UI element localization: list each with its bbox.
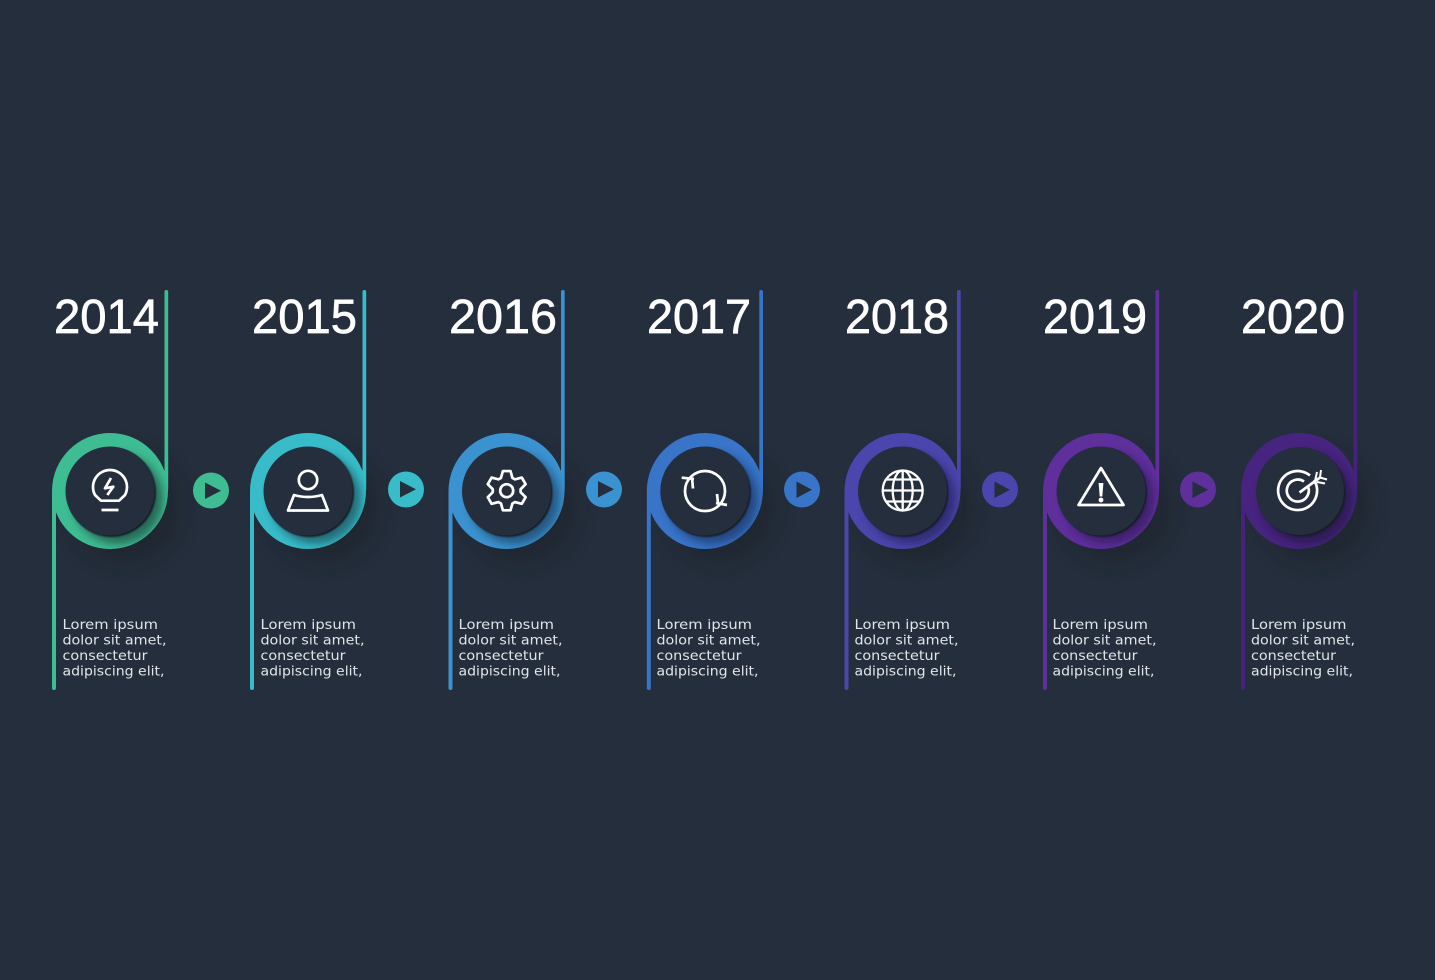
year 2018: 2018: [845, 291, 949, 344]
ring with connector lines 2015: [250, 290, 378, 690]
year 2015: 2015: [252, 291, 357, 344]
arrow button 2019: [1180, 472, 1216, 508]
text block 2020: adipiscing elit,: [1251, 664, 1353, 680]
arrow button 2014: [193, 472, 229, 508]
icon: globe: [883, 470, 923, 510]
text block 2015: consectetur: [260, 648, 346, 664]
text block 2014: Lorem ipsum: [62, 617, 158, 633]
arrow button 2015: [388, 472, 424, 508]
arrow button 2017: [784, 472, 820, 508]
text block 2016: [458, 617, 562, 680]
text block 2017: dolor sit amet,: [656, 632, 760, 648]
ring with connector lines 2016: [448, 290, 576, 690]
text block 2020: Lorem ipsum: [1251, 617, 1346, 633]
year 2019: 2019: [1043, 291, 1147, 344]
text block 2015: [260, 617, 364, 680]
text block 2017: adipiscing elit,: [656, 664, 758, 680]
text block 2019: consectetur: [1052, 648, 1138, 664]
text block 2014: consectetur: [62, 648, 148, 664]
icon: target with arrow: [1278, 470, 1327, 510]
text block 2018: Lorem ipsum: [854, 617, 950, 633]
text block 2018: adipiscing elit,: [854, 664, 956, 680]
text block 2016: adipiscing elit,: [458, 664, 560, 680]
text block 2020: consectetur: [1251, 648, 1336, 664]
text block 2019: adipiscing elit,: [1052, 664, 1154, 680]
text block 2018: dolor sit amet,: [854, 632, 958, 648]
text block 2017: Lorem ipsum: [656, 617, 752, 633]
text block 2019: [1052, 617, 1156, 680]
text block 2018: [854, 617, 958, 680]
ring with connector lines 2018: [844, 290, 972, 690]
ring with connector lines 2017: [647, 290, 775, 690]
milestone 2020: [1241, 290, 1369, 690]
milestone 2017: [647, 290, 820, 690]
year 2020: 2020: [1241, 291, 1345, 344]
text block 2017: [656, 617, 760, 680]
text block 2014: adipiscing elit,: [62, 664, 164, 680]
milestone 2014: [52, 290, 229, 690]
icon: gear: [488, 471, 526, 510]
text block 2016: consectetur: [458, 648, 544, 664]
text block 2019: Lorem ipsum: [1052, 617, 1148, 633]
year 2017: 2017: [647, 291, 751, 344]
arrow button 2018: [982, 472, 1018, 508]
icon: refresh circle: [682, 471, 727, 511]
text block 2014: [62, 617, 166, 680]
text block 2020: dolor sit amet,: [1251, 632, 1355, 648]
text block 2017: consectetur: [656, 648, 742, 664]
icon: person on map: [288, 471, 328, 510]
milestone 2015: [250, 290, 424, 690]
milestone 2019: [1043, 290, 1216, 690]
text block 2018: consectetur: [854, 648, 940, 664]
text block 2015: adipiscing elit,: [260, 664, 362, 680]
icon: light bulb with bolt: [93, 470, 127, 510]
text block 2016: Lorem ipsum: [458, 617, 554, 633]
text block 2019: dolor sit amet,: [1052, 632, 1156, 648]
ring with connector lines 2014: [52, 290, 180, 690]
arrow button 2016: [586, 472, 622, 508]
text block 2014: dolor sit amet,: [62, 632, 166, 648]
text block 2016: dolor sit amet,: [458, 632, 562, 648]
text block 2020: [1251, 617, 1355, 680]
milestone 2016: [448, 290, 622, 690]
text block 2015: dolor sit amet,: [260, 632, 364, 648]
year 2014: 2014: [54, 291, 159, 344]
icon: warning triangle: [1078, 468, 1124, 505]
year 2016: 2016: [449, 291, 557, 344]
text block 2015: Lorem ipsum: [260, 617, 356, 633]
milestone 2018: [844, 290, 1018, 690]
ring with connector lines 2019: [1043, 290, 1171, 690]
ring with connector lines 2020: [1241, 290, 1369, 690]
